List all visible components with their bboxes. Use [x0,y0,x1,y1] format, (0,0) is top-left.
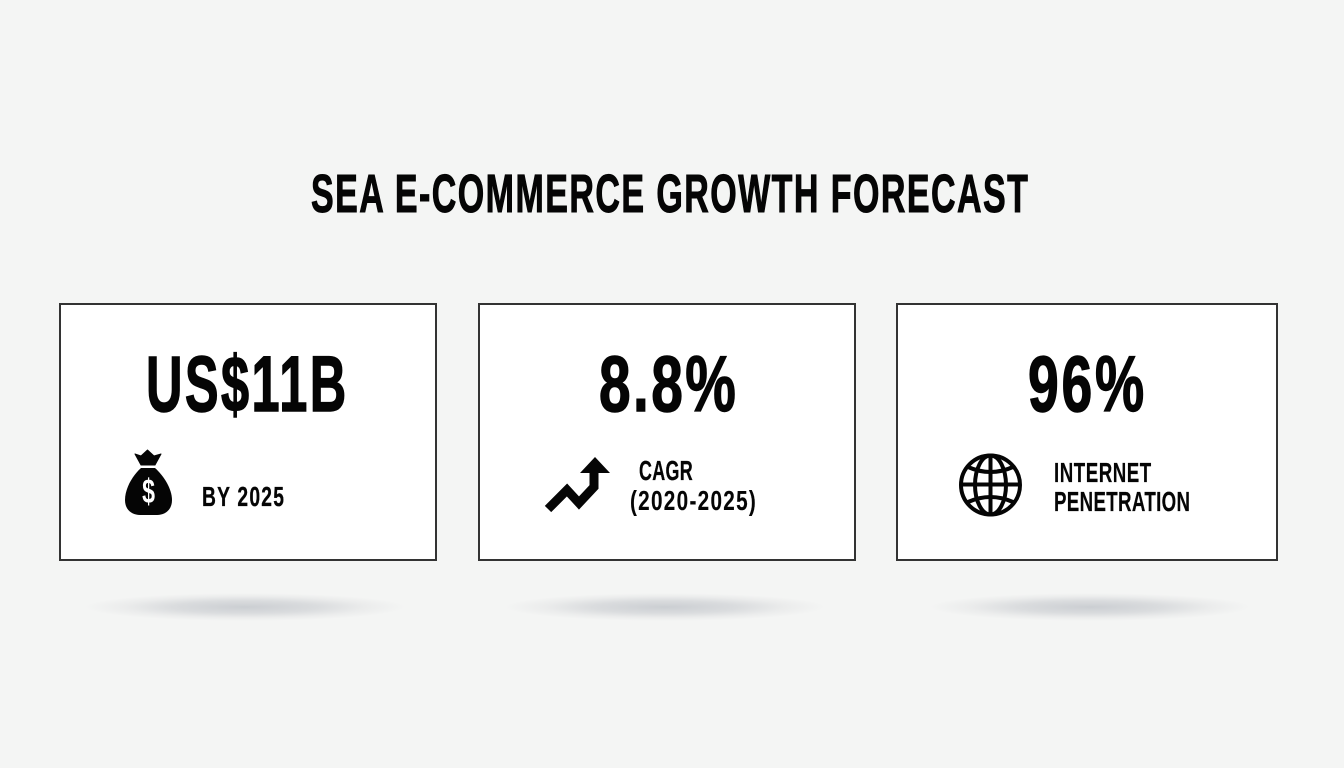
shadow: card 3 [930,593,1250,621]
title: SEA E-COMMERCE GROWTH FORECAST [311,163,1028,224]
panel: US$11B by 2025 [60,304,436,560]
label: CAGR: CAGR [639,455,693,486]
panel: 96% internet penetration [897,304,1277,560]
label: by 2025: BY 2025 [202,483,284,513]
stat: 8.8%: 8.8% [599,340,736,428]
dollar sign: $ [142,474,155,511]
shadow: card 2 [505,593,825,621]
icon: globe [961,455,1020,515]
icon: money bag [125,450,172,515]
icon: rising arrow [548,457,610,509]
label: internet: INTERNET [1054,457,1152,488]
panel: 8.8% CAGR [479,304,855,560]
stat: 96%: 96% [1028,340,1144,428]
label: penetration: PENETRATION [1054,486,1190,517]
shadow: card 1 [85,593,405,621]
stat: US$11B: US$11B [146,341,346,429]
label: 2020-2025: (2020-2025) [630,486,756,517]
